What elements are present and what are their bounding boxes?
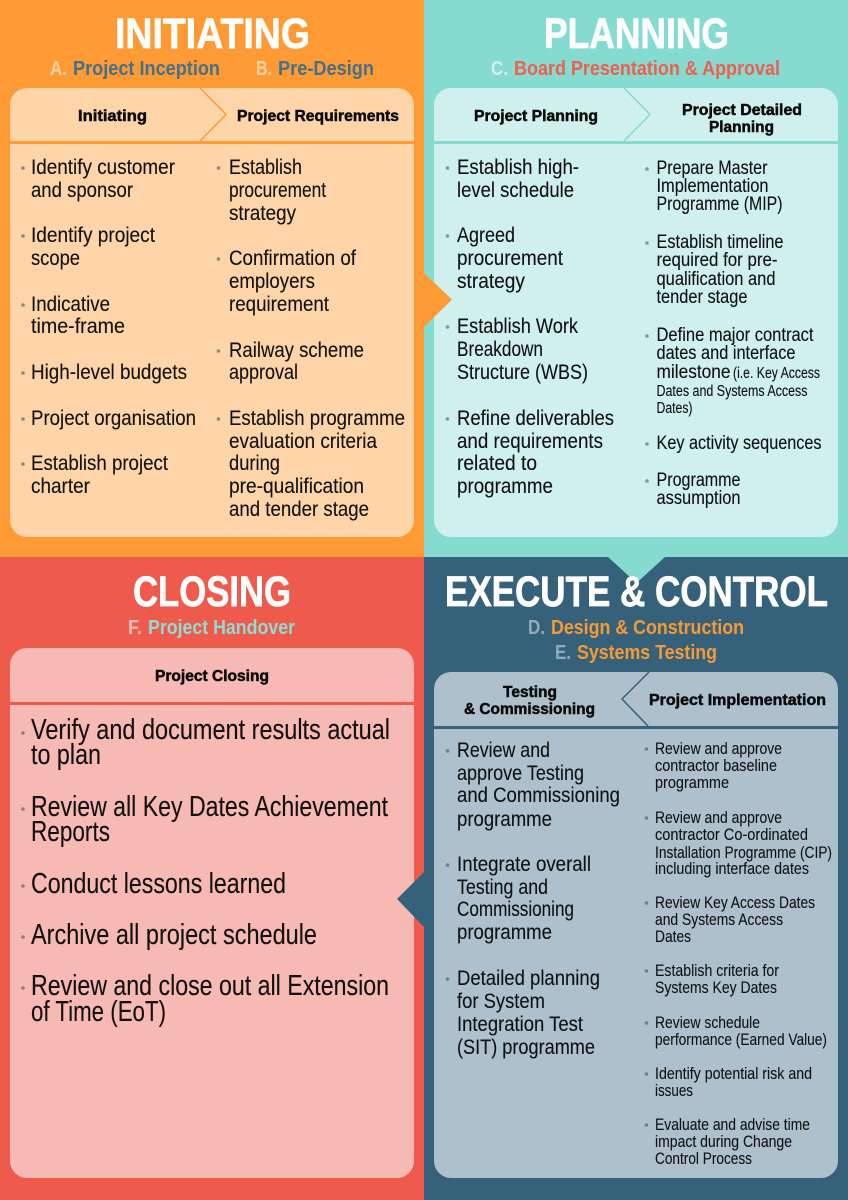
subheading: design and construction: D. xyxy=(528,617,545,639)
list: project detailed planning tasks: Dates) xyxy=(656,400,692,417)
list: project planning tasks: Agreed xyxy=(457,223,515,247)
list: project detailed planning tasks: Prepare Master xyxy=(656,158,768,179)
column header: project detailed planning xyxy=(682,102,802,136)
column header: project requirements: Project Requirements xyxy=(237,108,399,125)
list: project implementation tasks xyxy=(645,739,832,1168)
list: project planning tasks: Breakdown xyxy=(457,337,543,361)
list: project planning tasks: Establish Work xyxy=(457,314,578,338)
subheading: pre-design: B. xyxy=(256,58,272,80)
list: testing and commissioning tasks: and Commissioning xyxy=(457,783,620,807)
panel: initiating background xyxy=(0,0,424,557)
column header: initiating: Initiating xyxy=(78,108,147,125)
list: initiating tasks: Identify customer xyxy=(31,155,175,179)
list: project implementation tasks: contractor Co-ordinated xyxy=(655,825,808,844)
column header: testing and commissioning: & Commissioning xyxy=(464,701,595,718)
list: project closing tasks: Review all Key Dates Achievement xyxy=(31,791,388,823)
chevron: initiating to project requirements xyxy=(200,88,226,141)
card: execute and control xyxy=(434,672,838,1178)
list: project detailed planning tasks: Key activity sequences xyxy=(656,433,822,454)
list: project planning tasks: and requirements xyxy=(457,429,603,453)
column header: project detailed planning: Project Detailed xyxy=(682,102,802,119)
list: project closing tasks: to plan xyxy=(31,739,101,771)
card: closing xyxy=(10,648,414,1178)
list: project detailed planning tasks: Programme xyxy=(656,470,740,491)
list: testing and commissioning tasks: Integrate overall xyxy=(457,852,591,876)
subheading: project inception: Project Inception xyxy=(73,58,220,80)
list: project closing tasks: of Time (EoT) xyxy=(31,996,166,1028)
chevron: project planning to detailed planning xyxy=(624,88,650,141)
panel: execute and control xyxy=(434,569,838,1178)
header divider xyxy=(10,702,414,705)
column header: project implementation: Project Implementation xyxy=(649,692,826,709)
panel: planning background xyxy=(424,0,848,557)
subheading: project handover: F. xyxy=(128,617,142,639)
list: project closing tasks: Reports xyxy=(31,816,110,848)
list: project requirements tasks: strategy xyxy=(229,201,296,225)
list: project implementation tasks: Evaluate and advise time xyxy=(655,1115,810,1134)
column header: testing and commissioning xyxy=(464,684,595,718)
list: testing and commissioning tasks: Integration Test xyxy=(457,1012,583,1036)
list: project detailed planning tasks: dates and interface xyxy=(656,343,796,364)
list: project detailed planning tasks: Establish timeline xyxy=(656,232,784,253)
list: project planning tasks: Establish high- xyxy=(457,155,579,179)
list: project detailed planning tasks: milestone xyxy=(656,362,730,383)
list: project requirements tasks: pre-qualification xyxy=(229,474,364,498)
list: project implementation tasks: issues xyxy=(655,1081,693,1100)
list: project requirements tasks: employers xyxy=(229,269,315,293)
list: project requirements tasks: Establish programme xyxy=(229,406,405,430)
column header: project closing: Project Closing xyxy=(155,668,269,685)
subheading: project inception: A. xyxy=(50,58,67,80)
list: project closing tasks: Review and close out all Extension xyxy=(31,970,389,1002)
list: testing and commissioning tasks: for System xyxy=(457,989,545,1013)
list: project requirements tasks: procurement xyxy=(229,178,326,202)
list: project requirements tasks: approval xyxy=(229,360,298,384)
panel: closing xyxy=(10,569,414,1178)
list: project requirements tasks: Establish xyxy=(229,155,302,179)
list: project planning tasks: strategy xyxy=(457,269,525,293)
list: project closing tasks xyxy=(21,714,390,1028)
list: project implementation tasks: Systems Key Dates xyxy=(655,978,777,997)
list: initiating tasks: and sponsor xyxy=(31,178,133,202)
list: testing and commissioning tasks: (SIT) programme xyxy=(457,1035,595,1059)
list: initiating tasks: Identify project xyxy=(31,223,155,247)
subheading: systems testing: Systems Testing xyxy=(577,642,717,664)
list: project detailed planning tasks: Dates and Systems Access xyxy=(656,383,808,400)
list: project planning tasks: Structure (WBS) xyxy=(457,360,588,384)
list: project requirements tasks xyxy=(217,155,405,521)
list: testing and commissioning tasks: Testing and xyxy=(457,875,548,899)
list: project requirements tasks: and tender stage xyxy=(229,497,369,521)
list: project planning tasks: programme xyxy=(457,474,553,498)
list: project implementation tasks: Identify potential risk and xyxy=(655,1064,812,1083)
list: project planning tasks: procurement xyxy=(457,246,563,270)
list: testing and commissioning tasks: programme xyxy=(457,920,552,944)
chevron: project implementation to testing xyxy=(622,672,649,726)
list: project implementation tasks: Review Key Access Dates xyxy=(655,893,815,912)
arrow: initiating to planning xyxy=(424,273,452,327)
list: testing and commissioning tasks: Commissioning xyxy=(457,897,574,921)
list: initiating tasks: High-level budgets xyxy=(31,360,187,384)
list: project requirements tasks: Confirmation of xyxy=(229,246,356,270)
list: initiating tasks: scope xyxy=(31,246,80,270)
column header: testing and commissioning: Testing xyxy=(503,684,557,701)
list: project implementation tasks: Review schedule xyxy=(655,1013,760,1032)
list: initiating tasks: Establish project xyxy=(31,451,168,475)
list: project implementation tasks: Review and approve xyxy=(655,739,782,758)
heading: initiating: INITIATING xyxy=(115,11,310,58)
subheading: pre-design: Pre-Design xyxy=(278,58,374,80)
header divider xyxy=(434,141,838,144)
subheading: design and construction: Design & Construction xyxy=(551,617,744,639)
list: testing and commissioning tasks: Review and xyxy=(457,738,550,762)
list: project planning tasks: level schedule xyxy=(457,178,574,202)
arrow: planning to execute xyxy=(608,557,665,583)
subheading: project handover: Project Handover xyxy=(148,617,295,639)
list: project closing tasks: Archive all project schedule xyxy=(31,919,317,951)
list: project detailed planning tasks: qualification and xyxy=(656,269,776,290)
list: project requirements tasks: evaluation criteria xyxy=(229,429,377,453)
list: testing and commissioning tasks xyxy=(446,738,620,1059)
subheading: board presentation and approval: C. xyxy=(491,58,508,80)
panel: planning xyxy=(434,11,838,537)
subheading: board presentation and approval: Board Presentation & Approval xyxy=(514,58,780,80)
list: initiating tasks: Indicative xyxy=(31,292,110,316)
list: initiating tasks xyxy=(21,155,196,498)
list: project requirements tasks: during xyxy=(229,451,280,475)
list: project implementation tasks: Review and approve xyxy=(655,808,782,827)
list: project closing tasks: Conduct lessons learned xyxy=(31,868,286,900)
list: project requirements tasks: requirement xyxy=(229,292,329,316)
column header: project planning: Project Planning xyxy=(474,108,598,125)
list: initiating tasks: charter xyxy=(31,474,90,498)
list: project detailed planning tasks: (i.e. Key Access xyxy=(733,365,820,382)
list: testing and commissioning tasks: Detailed planning xyxy=(457,966,600,990)
list: project planning tasks: related to xyxy=(457,451,537,475)
list: project detailed planning tasks: Programme (MIP) xyxy=(656,194,782,215)
list: project detailed planning tasks: required for pre- xyxy=(656,250,778,271)
list: project implementation tasks: Control Process xyxy=(655,1149,752,1168)
card: initiating xyxy=(10,88,414,537)
list: project implementation tasks: contractor baseline xyxy=(655,756,777,775)
list: testing and commissioning tasks: programme xyxy=(457,807,552,831)
list: project closing tasks: Verify and document results actual xyxy=(31,714,390,746)
list: project detailed planning tasks: Define major contract xyxy=(656,325,814,346)
list: project planning tasks: Refine deliverables xyxy=(457,406,614,430)
list: project planning tasks xyxy=(446,155,614,498)
list: project detailed planning tasks: assumption xyxy=(656,488,740,509)
list: initiating tasks: Project organisation xyxy=(31,406,196,430)
subheading: systems testing: E. xyxy=(555,642,571,664)
panel: initiating xyxy=(10,11,414,537)
list: project implementation tasks: programme xyxy=(655,773,729,792)
header divider xyxy=(10,141,414,144)
heading: planning: PLANNING xyxy=(544,11,729,58)
list: project implementation tasks: Establish criteria for xyxy=(655,961,779,980)
list: testing and commissioning tasks: approve Testing xyxy=(457,761,584,785)
list: project implementation tasks: impact during Change xyxy=(655,1132,792,1151)
list: project detailed planning tasks: Implementation xyxy=(656,176,768,197)
list: project detailed planning tasks xyxy=(645,158,822,509)
list: project implementation tasks: and Systems Access xyxy=(655,910,783,929)
column header: project detailed planning: Planning xyxy=(709,119,774,136)
card: planning xyxy=(434,88,838,537)
list: initiating tasks: time-frame xyxy=(31,314,125,338)
list: project implementation tasks: Dates xyxy=(655,927,691,946)
panel: closing background xyxy=(0,557,424,1200)
list: project implementation tasks: including interface dates xyxy=(655,859,809,878)
arrow: execute to closing xyxy=(397,872,424,927)
header divider xyxy=(434,726,838,729)
list: project detailed planning tasks: tender stage xyxy=(656,287,748,308)
heading: closing: CLOSING xyxy=(133,569,291,616)
list: project requirements tasks: Railway scheme xyxy=(229,338,364,362)
panel: execute and control background xyxy=(424,557,848,1200)
